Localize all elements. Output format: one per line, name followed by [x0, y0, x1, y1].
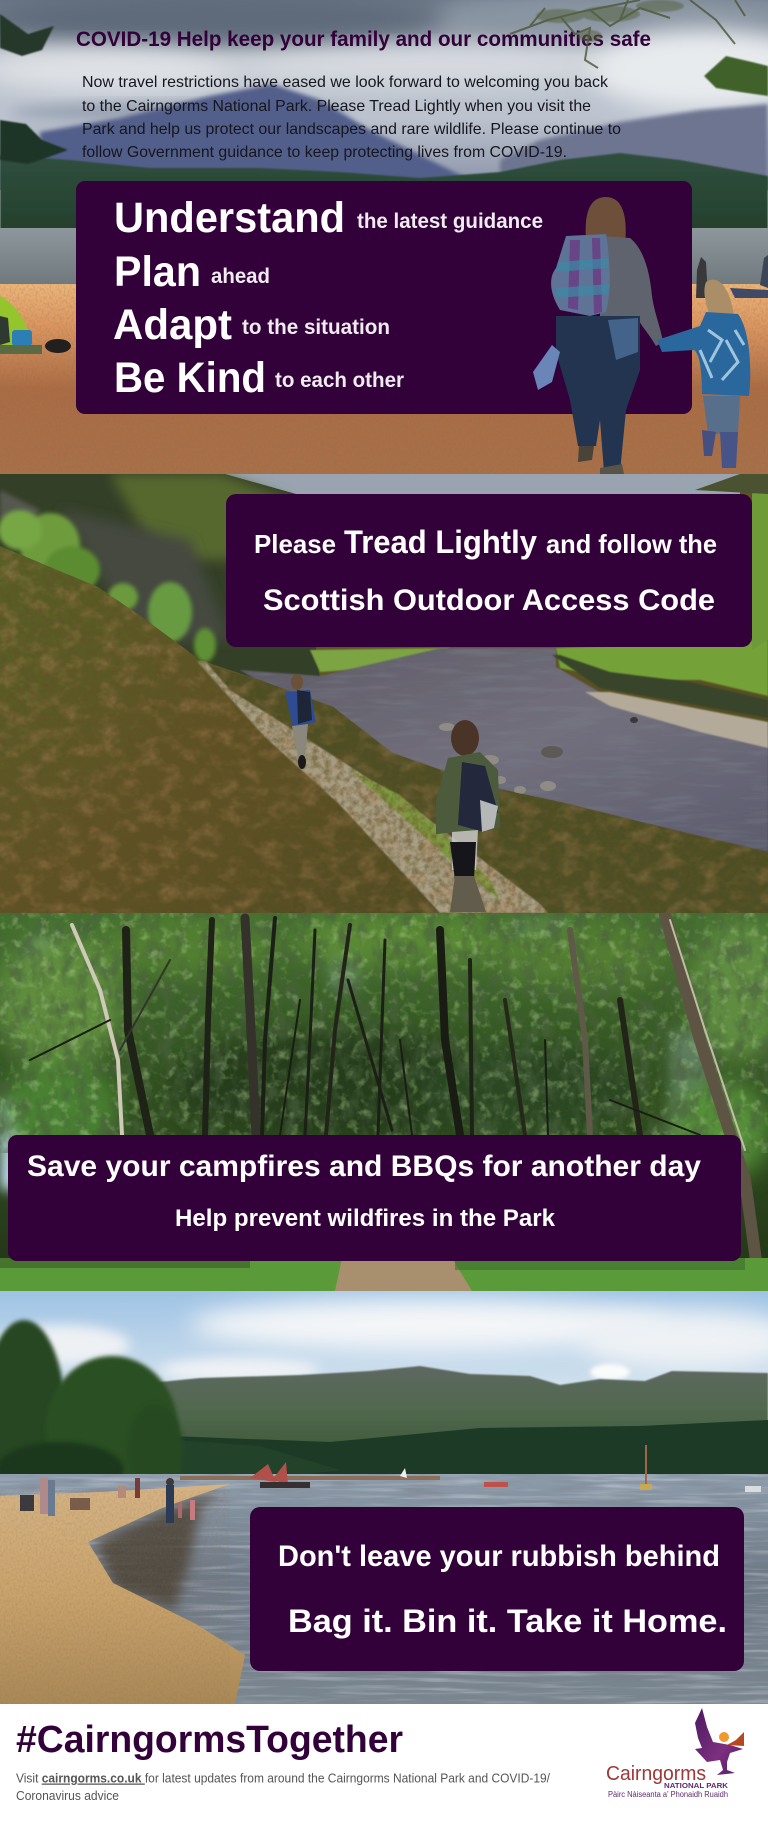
conifer forest	[0, 153, 768, 230]
card: understand plan adapt be kind: Be Kind	[114, 354, 266, 402]
intro text block: Park and help us protect our landscapes and rare wildlife. Please continue to	[82, 121, 621, 138]
grass and track	[0, 1258, 768, 1291]
card: tread lightly: Scottish Outdoor Access Code	[263, 584, 715, 617]
illustration: mother and child walking	[533, 197, 750, 476]
intro text block: follow Government guidance to keep protecting lives from COVID-19.	[82, 144, 567, 161]
footer note	[16, 1772, 551, 1803]
mountains	[40, 84, 768, 190]
texture: river	[261, 650, 768, 848]
card: campfires: Help prevent wildfires in the Park	[175, 1205, 555, 1232]
base heather fill	[196, 492, 768, 913]
rocky tree slope	[0, 474, 320, 680]
mountains	[150, 1366, 768, 1450]
footer note: Coronavirus advice	[16, 1789, 119, 1803]
card: understand plan adapt be kind: Understand	[114, 194, 345, 242]
card: tread lightly: Please	[254, 529, 336, 559]
panel: birch woodland photo section	[0, 912, 768, 1291]
beachgoers	[20, 1478, 195, 1523]
card: tread lightly: and follow the	[546, 529, 717, 559]
water	[0, 1474, 768, 1704]
heather slope left	[0, 546, 196, 660]
texture: heather tones	[0, 540, 768, 913]
hiker far	[285, 674, 316, 769]
logo subtitle: NATIONAL PARK	[664, 1783, 728, 1790]
hashtag heading: #CairngormsTogether	[16, 1719, 403, 1761]
loch	[0, 228, 768, 288]
card: understand plan adapt be kind: Plan	[114, 248, 201, 296]
card: understand plan adapt be kind: the latest guidance	[357, 210, 543, 233]
texture: sand	[0, 1490, 230, 1704]
tree branches framing the photo	[0, 0, 768, 164]
logo: Cairngorms National Park	[606, 1708, 744, 1799]
sandy beach	[0, 284, 768, 474]
panel: beach photo section	[0, 0, 768, 474]
icon: osprey	[695, 1708, 743, 1775]
logo gaelic name: Pàirc Nàiseanta a' Phonaidh Ruaidh	[608, 1790, 728, 1799]
child	[657, 280, 750, 468]
panel: footer	[0, 1704, 768, 1826]
footpath	[198, 662, 548, 913]
icon: sun	[719, 1732, 729, 1742]
tree trunks	[30, 915, 760, 1290]
card: tread lightly	[226, 494, 752, 647]
river	[240, 648, 768, 852]
backpack	[551, 234, 610, 316]
intro text block	[82, 74, 621, 161]
distant people on shore	[696, 255, 768, 298]
sky gap	[225, 474, 740, 494]
panel: hillside path photo section	[0, 470, 768, 913]
card: understand plan adapt be kind: Adapt	[113, 301, 232, 349]
far grass	[310, 648, 450, 672]
card: rubbish: Bag it. Bin it. Take it Home.	[288, 1603, 727, 1639]
card: rubbish: Don't leave your rubbish behind	[278, 1540, 720, 1573]
shoreline dark water	[95, 1490, 220, 1610]
forest along the loch	[170, 1420, 768, 1490]
jacket in hand	[533, 345, 560, 390]
texture: water ripples	[0, 1474, 768, 1704]
sky and clouds	[0, 0, 768, 190]
icon: flame wing	[727, 1732, 744, 1746]
intro text block: to the Cairngorms National Park. Please Tread Lightly when you visit the	[82, 98, 591, 115]
distant shore crowds and boats	[180, 1445, 761, 1492]
pine cluster left	[0, 1320, 183, 1520]
intro text block: Now travel restrictions have eased we look forward to welcoming you back	[82, 74, 609, 91]
card: understand plan adapt be kind: ahead	[211, 265, 270, 288]
sky with clouds	[0, 1291, 768, 1481]
hiker near	[436, 720, 500, 912]
card: campfires	[8, 1135, 741, 1261]
mother	[533, 197, 663, 476]
card: understand plan adapt be kind	[76, 181, 692, 414]
texture: leaves	[0, 913, 768, 1153]
tent and bags	[0, 296, 71, 354]
foliage	[0, 912, 768, 1180]
card: rubbish	[250, 1507, 744, 1671]
birch trees	[0, 510, 216, 662]
panel: loch beach photo section	[0, 1291, 768, 1704]
grass bank and shingle	[552, 470, 768, 748]
heather slope lower right	[206, 665, 768, 913]
card: tread lightly: Tread Lightly	[344, 524, 537, 560]
sand	[0, 1484, 245, 1704]
footer note: Visit cairngorms.co.uk for latest updates from around the Cairngorms National Park and COVID-19/	[16, 1772, 551, 1786]
heading: COVID-19 Help keep your family and our communities safe	[76, 28, 651, 51]
card: campfires: Save your campfires and BBQs for another day	[27, 1150, 701, 1183]
card: understand plan adapt be kind: to the situation	[242, 316, 390, 339]
logo wordmark: Cairngorms	[606, 1763, 706, 1785]
card: understand plan adapt be kind: to each other	[275, 369, 404, 392]
sky glimpses	[0, 920, 710, 1190]
river stones	[439, 717, 638, 794]
